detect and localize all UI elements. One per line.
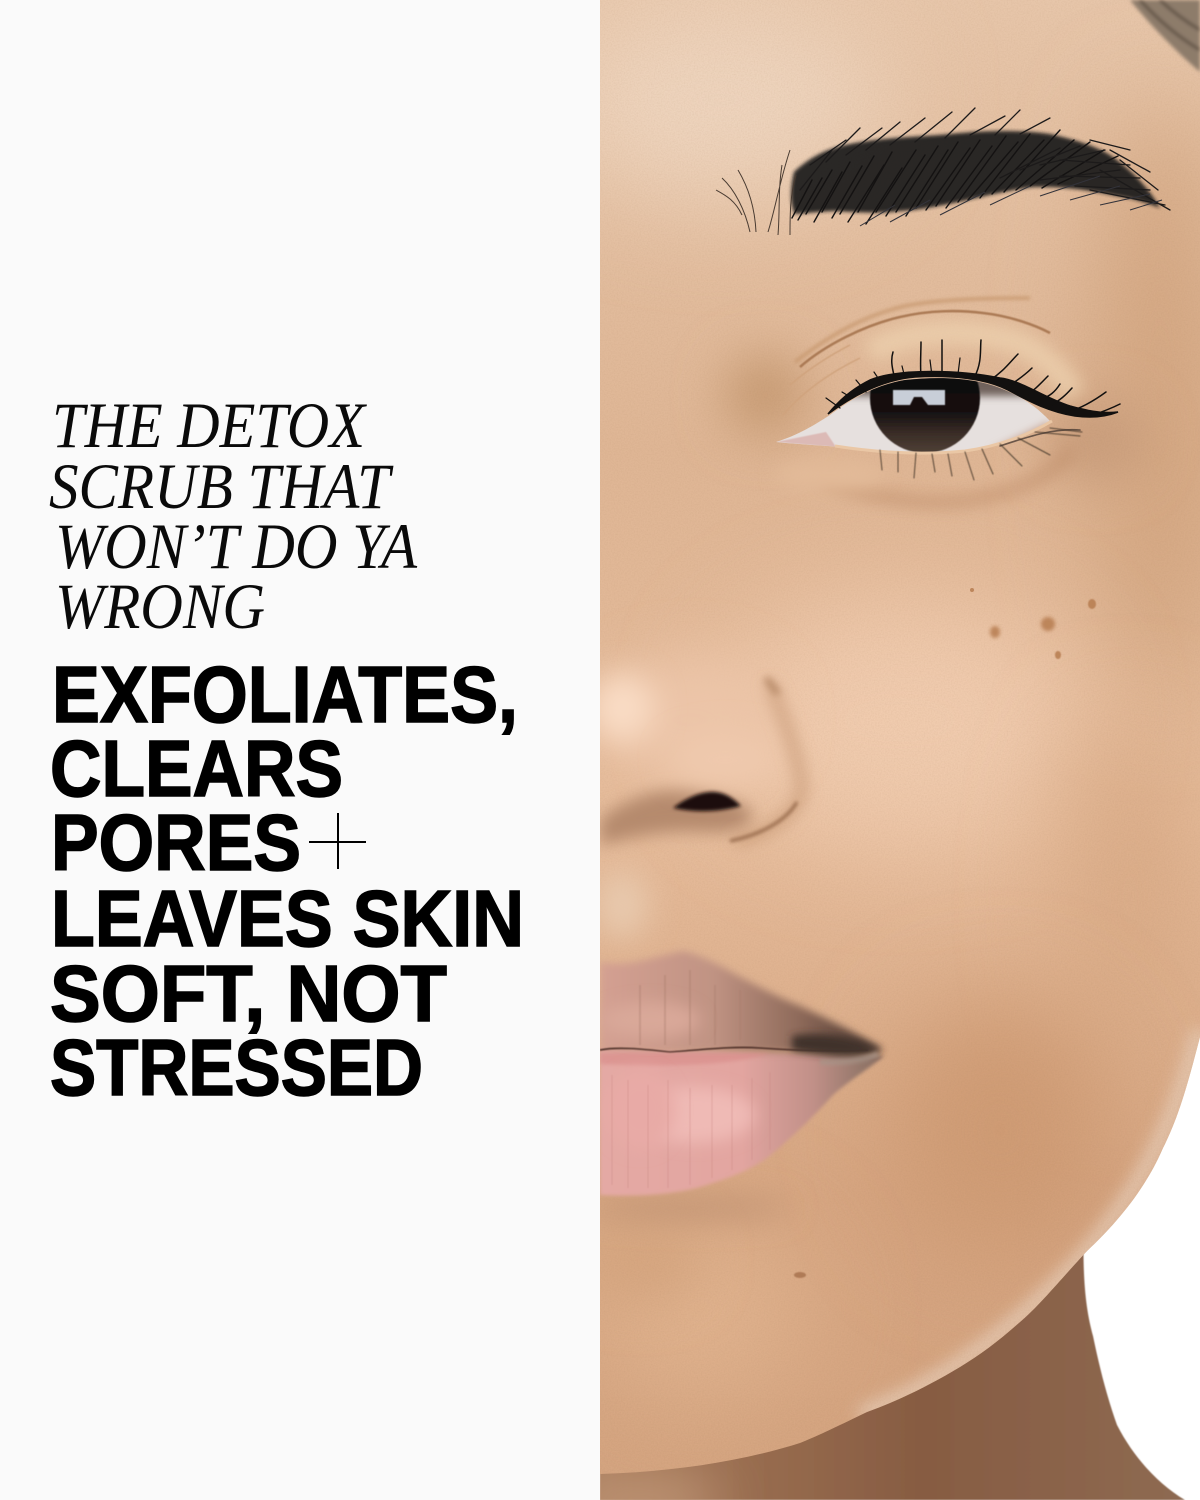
eye socket creases [775, 298, 1075, 502]
heading: serif tagline [49, 390, 417, 643]
heading: bold benefits statement: SOFT, NOT [50, 949, 447, 1038]
iris [869, 378, 981, 452]
heading: bold benefits statement: STRESSED [50, 1023, 423, 1112]
white photo background [600, 0, 1200, 1500]
icon: eyebrow [716, 108, 1170, 235]
philtrum highlight [596, 871, 648, 939]
icon: nose [590, 655, 802, 845]
heading: bold benefits statement: EXFOLIATES, [52, 650, 518, 739]
icon: eyelashes [826, 340, 1120, 480]
heading: bold benefits statement: LEAVES SKIN [51, 874, 524, 963]
icon: eye [776, 378, 1052, 454]
face skin with tonal shading [550, 0, 1200, 1500]
photo panel: close-up of face [550, 0, 1200, 1500]
heading: serif tagline: WRONG [55, 571, 265, 643]
neck [600, 1254, 1186, 1500]
icon: lips [600, 951, 884, 1196]
eye reflection [893, 390, 945, 405]
heading: bold benefits statement: PORES [51, 798, 301, 887]
heading: serif tagline: THE DETOX [52, 390, 367, 462]
heading: serif tagline: WON’T DO YA [55, 511, 417, 583]
heading: serif tagline: SCRUB THAT [49, 451, 393, 523]
shadow under lower lip [590, 1198, 790, 1218]
heading: bold benefits statement: CLEARS [50, 724, 343, 813]
hair at temple [1130, 0, 1200, 72]
icon: thin plus sign [309, 813, 366, 869]
heading: bold benefits statement [50, 650, 524, 1112]
freckles on cheek [794, 588, 1096, 1278]
